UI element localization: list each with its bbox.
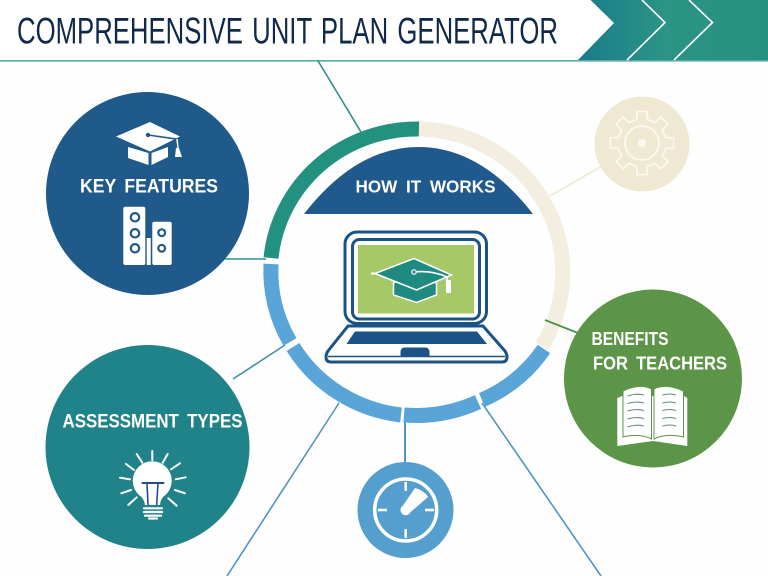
- panel: clock: [358, 462, 454, 558]
- label: benefits for teachers: BENEFITS: [592, 328, 668, 349]
- panel: gear: [594, 96, 690, 192]
- label: benefits for teachers: FOR TEACHERS: [593, 352, 727, 374]
- header chevron band: [578, 0, 768, 60]
- label: key features: KEY FEATURES: [80, 176, 218, 198]
- panel: key features: [46, 92, 249, 295]
- connector lines: [225, 60, 602, 576]
- label: benefits for teachers: [592, 328, 727, 374]
- heading: how it works: HOW IT WORKS: [356, 176, 496, 196]
- ring segment: teal: [271, 129, 419, 258]
- ring segment: blue bottom: [404, 402, 478, 415]
- panel: benefits for teachers: [564, 290, 742, 468]
- icon: clock: [375, 479, 437, 541]
- ring segment: cream: [419, 129, 563, 346]
- ring segment: blue left: [271, 264, 290, 342]
- central ring: [271, 129, 563, 415]
- icon: open book: [617, 386, 687, 446]
- connector: green line to benefits: [545, 320, 578, 333]
- icon: buildings: [123, 207, 172, 265]
- ring segment: blue bottom left: [293, 347, 401, 415]
- how it works cap: [304, 147, 533, 214]
- label: assessment types: ASSESSMENT TYPES: [62, 412, 242, 432]
- icon: gear: [610, 111, 674, 175]
- panel: assessment types: [46, 345, 250, 549]
- header: title bar: [0, 0, 768, 62]
- ring segment: blue right: [482, 349, 544, 400]
- icon: graduation cap: [116, 122, 182, 165]
- icon: laptop with graduation cap: [326, 232, 507, 362]
- icon: light bulb: [120, 451, 186, 518]
